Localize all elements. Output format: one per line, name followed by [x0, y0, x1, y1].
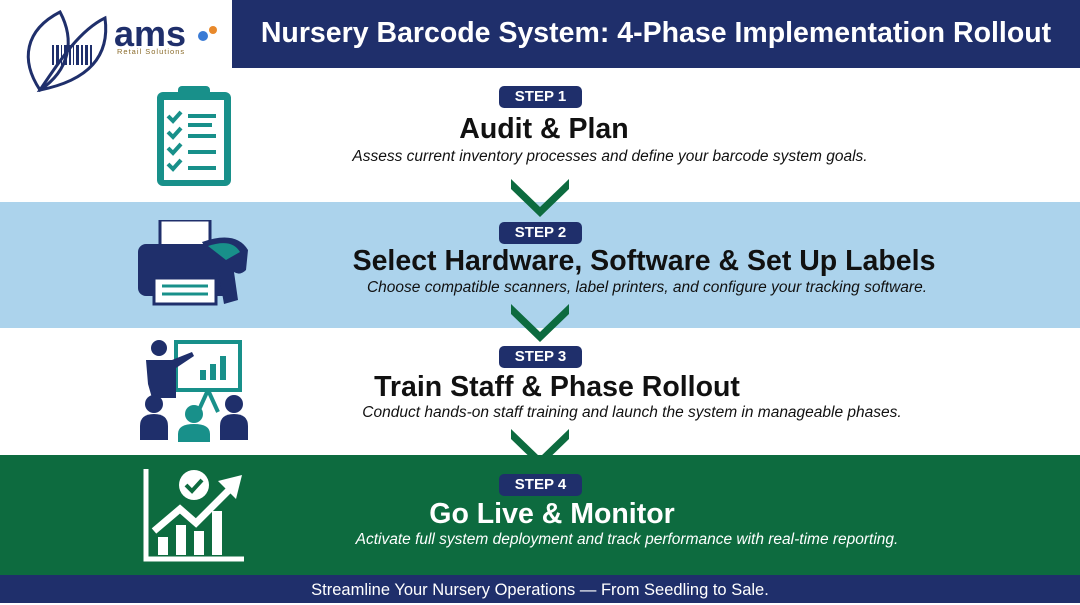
logo: Retail Solutions	[117, 47, 185, 56]
step 2	[138, 220, 935, 306]
title bar: Nursery Barcode System: 4-Phase Implementation Rollout	[261, 17, 1051, 49]
icon: clipboard	[157, 86, 231, 186]
step 2 heading: Select Hardware, Software & Set Up Labels	[353, 245, 935, 277]
band: step 2 background	[0, 202, 1080, 328]
arrow 2	[511, 304, 569, 342]
step 4 pill	[499, 474, 582, 496]
title bar	[232, 0, 1080, 68]
arrow 1	[511, 179, 569, 217]
step 1 pill	[499, 86, 582, 108]
step 3 description: Conduct hands-on staff training and launch the system in manageable phases.	[362, 404, 902, 421]
step 3	[140, 340, 902, 442]
logo: ams	[114, 13, 186, 54]
step 4 pill: STEP 4	[515, 476, 566, 493]
step 1 heading: Audit & Plan	[459, 113, 629, 145]
step 1 pill: STEP 1	[515, 88, 566, 105]
logo	[26, 10, 217, 92]
band: step 4 background	[0, 455, 1080, 575]
icon: printer and scanner	[138, 220, 248, 306]
step 2 pill: STEP 2	[515, 224, 566, 241]
step 2 pill	[499, 222, 582, 244]
icon: training presentation	[140, 340, 248, 442]
step 3 heading: Train Staff & Phase Rollout	[374, 371, 740, 403]
step 4	[144, 469, 898, 562]
step 2 description: Choose compatible scanners, label printers, and configure your tracking software.	[367, 279, 927, 296]
footer: Streamline Your Nursery Operations — From Seedling to Sale.	[311, 581, 769, 599]
step 1	[157, 86, 868, 186]
step 3 pill: STEP 3	[515, 348, 566, 365]
icon: growth chart	[144, 469, 244, 562]
footer	[0, 575, 1080, 603]
step 1 description: Assess current inventory processes and define your barcode system goals.	[352, 148, 868, 165]
step 3 pill	[499, 346, 582, 368]
step 4 heading: Go Live & Monitor	[429, 498, 675, 530]
arrow 3	[511, 429, 569, 455]
step 4 description: Activate full system deployment and track performance with real-time reporting.	[356, 531, 898, 548]
